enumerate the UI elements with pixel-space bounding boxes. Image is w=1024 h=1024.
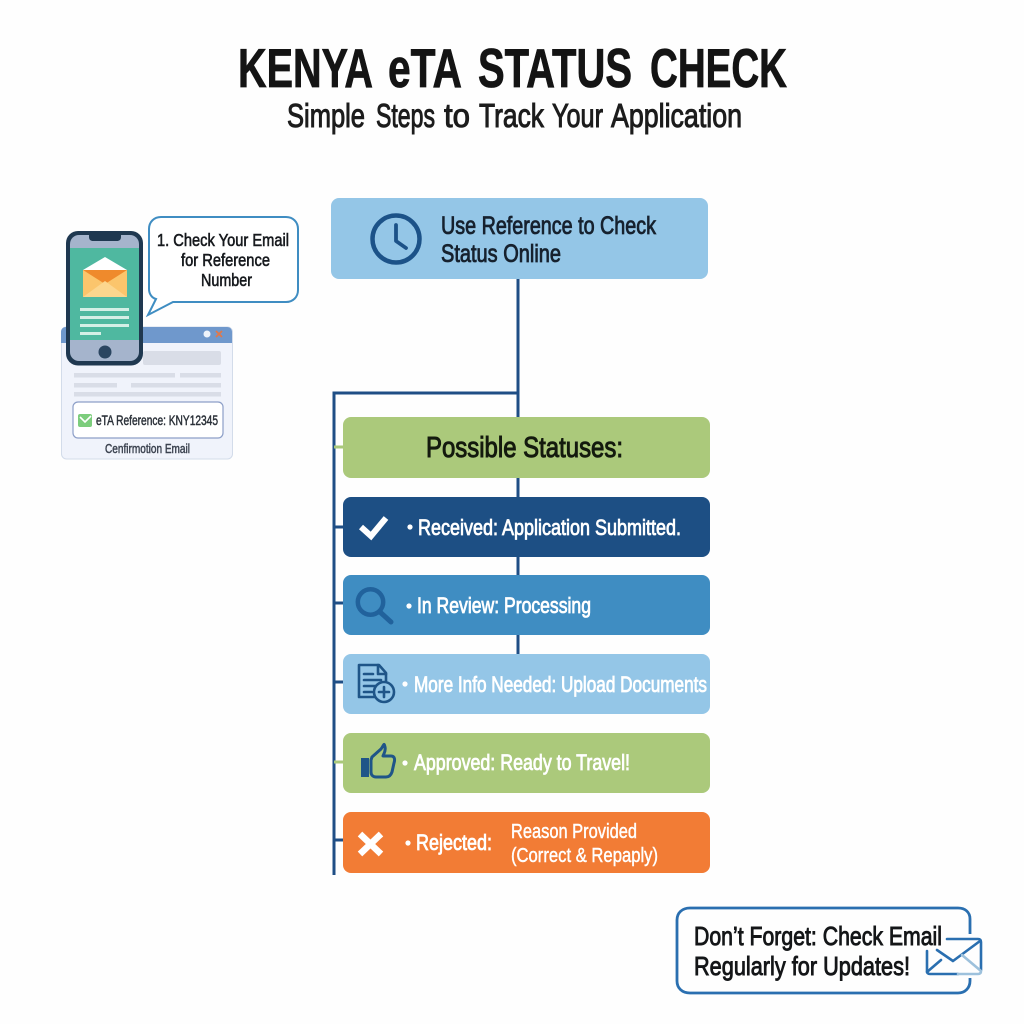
- approved text: Approved: Ready to Travel!: [414, 750, 630, 775]
- panel: confirmation email window: [61, 327, 232, 459]
- rejection reason text: [511, 821, 658, 867]
- title: KENYA: [238, 37, 373, 99]
- subtitle: to: [444, 97, 470, 134]
- step text: Use Reference to Check: [441, 212, 656, 240]
- step text: [441, 212, 656, 268]
- icon: document with plus: [359, 665, 394, 702]
- panel: possible statuses heading: [343, 417, 710, 478]
- more info text: More Info Needed: Upload Documents: [414, 672, 707, 697]
- panel: rejected status: [343, 812, 710, 873]
- title: [238, 37, 787, 99]
- window caption: Cenfirmotion Email: [105, 442, 190, 456]
- callout: don't forget reminder: [677, 908, 981, 993]
- placeholder text lines: [74, 351, 221, 396]
- callout: check your email: [148, 217, 298, 315]
- subtitle: Your: [552, 97, 603, 134]
- panel: in review status: [343, 575, 710, 635]
- title: CHECK: [650, 37, 787, 99]
- screen lines: [80, 308, 129, 335]
- reminder text: Don’t Forget: Check Email: [694, 921, 942, 951]
- panel: use reference step: [331, 198, 708, 279]
- window buttons: [204, 330, 222, 338]
- reference number box: eTA Reference: KNY12345: [96, 413, 218, 428]
- icon: cross: [360, 834, 381, 854]
- subtitle: Simple: [287, 97, 365, 134]
- callout: check your email: for Reference: [181, 250, 270, 270]
- icon: clock: [372, 216, 420, 262]
- icon: check mark: [361, 518, 386, 536]
- reminder text: [694, 921, 942, 981]
- subtitle: [287, 97, 742, 134]
- icon: magnifier: [358, 589, 391, 622]
- in review text: In Review: Processing: [417, 593, 591, 618]
- rejected text: Rejected:: [416, 830, 492, 855]
- subtitle: Steps: [376, 97, 435, 134]
- callout: check your email: Number: [201, 270, 252, 290]
- panel: more info needed status: [343, 654, 710, 714]
- received text: Received: Application Submitted.: [418, 515, 681, 540]
- subtitle: Application: [611, 97, 742, 134]
- subtitle: Track: [479, 97, 544, 134]
- rejection reason text: (Correct & Repaply): [511, 845, 658, 867]
- title: STATUS: [478, 37, 632, 99]
- envelope: [83, 257, 127, 297]
- icon: smartphone with email: [66, 231, 143, 366]
- panel: approved status: [343, 733, 710, 793]
- title: eTA: [388, 37, 462, 99]
- flow connector lines: [334, 279, 518, 875]
- reference number box: [73, 402, 223, 438]
- callout: check your email: 1. Check Your Email: [157, 230, 289, 250]
- panel: received status: [343, 497, 710, 557]
- step text: Status Online: [441, 240, 561, 268]
- panel: possible statuses heading: Possible Statuses:: [426, 432, 623, 464]
- reminder text: Regularly for Updates!: [694, 951, 910, 981]
- rejection reason text: Reason Provided: [511, 821, 637, 843]
- icon: thumbs up: [361, 744, 395, 777]
- icon: envelope: [927, 939, 981, 974]
